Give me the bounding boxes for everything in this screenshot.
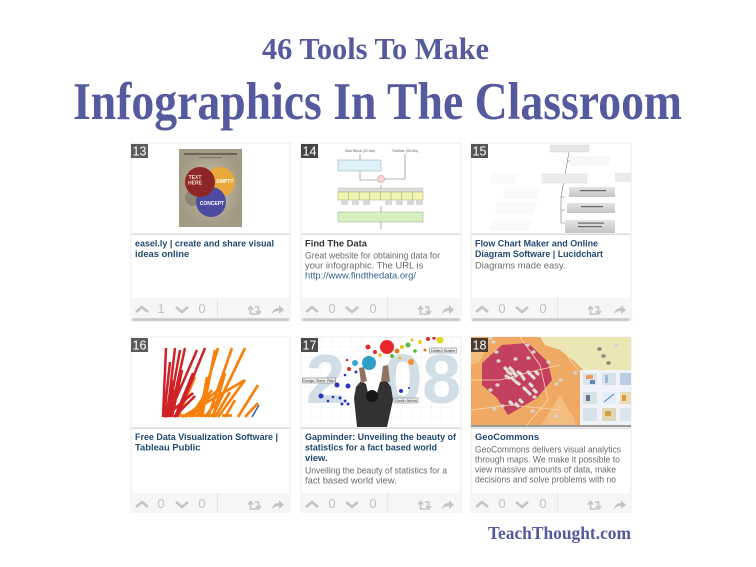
- card 18 description: through maps. We make it possible to: [475, 454, 620, 464]
- card 18 divider: [471, 428, 631, 429]
- card 17 number badge: 17: [303, 338, 316, 352]
- card 18 toolbar: 0: [539, 496, 547, 511]
- card 13 number badge: 13: [133, 144, 146, 158]
- card 18 description: view massive amounts of data, make: [475, 464, 616, 474]
- card 18 image: map: [471, 337, 634, 427]
- card 17 description: fact based world view.: [305, 474, 397, 486]
- card 17 map labels: United States: [431, 348, 455, 353]
- card 16 heading: Tableau Public: [135, 442, 200, 452]
- card 13 image: poster with Venn circles: CONCEPT: [200, 201, 224, 207]
- card 13 image: poster with Venn circles: TEXT: [189, 175, 201, 181]
- card 15 toolbar: [471, 298, 631, 320]
- card 18 number badge: 18: [473, 338, 486, 352]
- card 15 divider: [471, 234, 631, 235]
- card 15 heading: Flow Chart Maker and Online: [475, 238, 598, 248]
- card 18 toolbar: 0: [498, 496, 506, 511]
- card 15 number badge: 15: [473, 144, 486, 158]
- card 15 heading: [475, 238, 603, 259]
- card 13 image: poster with Venn circles: EMPTY: [216, 179, 234, 185]
- card 13 heading: easel.ly | create and share visual: [135, 238, 274, 248]
- card 14 description: your infographic. The URL is: [305, 260, 424, 270]
- card 15 toolbar: 0: [539, 301, 547, 316]
- card 13 heading line 2: ideas online: [135, 248, 189, 259]
- card 17 map labels: Congo, Dem. Rep.: [302, 378, 336, 383]
- card 13 image: poster with Venn circles: HERE: [188, 180, 203, 186]
- card 17 toolbar: 0: [328, 496, 336, 511]
- card 14 description: [305, 250, 440, 280]
- card 17 heading: statistics for a fact based world: [305, 442, 437, 452]
- card 17 map labels: [302, 348, 456, 403]
- card 16 toolbar: [131, 493, 290, 512]
- card 14 image: block diagram: [338, 149, 423, 229]
- card 13: easel.ly: [131, 143, 290, 320]
- card 18 heading: GeoCommons: [475, 431, 539, 442]
- card 16 heading: Free Data Visualization Software |: [135, 431, 278, 442]
- card 17 heading: [305, 431, 457, 463]
- card 16 image: red and orange line chart: [163, 348, 259, 417]
- card 13 toolbar: 1: [157, 301, 165, 316]
- card 14 toolbar: [301, 298, 461, 320]
- card 14 toolbar: 0: [328, 301, 336, 316]
- card 18 toolbar: [471, 493, 631, 512]
- card 16 heading: [135, 431, 278, 452]
- card 14 number badge: 14: [303, 144, 316, 158]
- card 14 description: Great website for obtaining data for: [305, 250, 440, 260]
- card 14 image: block diagram: Start Block (32 bits): [345, 149, 375, 153]
- card 14 description: http://www.findthedata.org/: [305, 270, 416, 280]
- card 17 description: Unveiling the beauty of statistics for a: [305, 464, 448, 476]
- card 15 heading: Diagram Software | Lucidchart: [475, 248, 603, 259]
- card 17 description: [305, 464, 448, 486]
- card 13 toolbar: [131, 298, 290, 320]
- card 16 divider: [131, 428, 290, 429]
- card 15 description: Diagrams made easy.: [475, 260, 566, 270]
- source credit: TeachThought.com: [488, 523, 631, 543]
- card 15 image: org chart: [490, 145, 635, 233]
- card 14 divider: [301, 234, 461, 235]
- card 17: Gapminder: [301, 336, 461, 512]
- card 14: Find The Data: [301, 143, 461, 320]
- card 17 heading: view.: [305, 452, 328, 463]
- card 18 description: decisions and solve problems with no: [475, 474, 616, 484]
- card 17 divider: [301, 428, 461, 429]
- card 17 toolbar: 0: [369, 496, 377, 511]
- card 16 number badge: 16: [133, 338, 146, 352]
- card 13 toolbar: 0: [198, 301, 206, 316]
- card 18 description: GeoCommons delivers visual analytics: [475, 444, 621, 454]
- card 17 image: 2008 bubble chart with man: 2008: [306, 340, 461, 418]
- card 18 description: [475, 444, 621, 484]
- card 17 heading: Gapminder: Unveiling the beauty of: [305, 431, 457, 442]
- card 16 toolbar: 0: [198, 496, 206, 511]
- card 16 toolbar: 0: [157, 496, 165, 511]
- card 13 image: poster with Venn circles: [179, 149, 242, 227]
- card 18 thumbnail panel: [580, 370, 634, 425]
- card 14 toolbar: 0: [369, 301, 377, 316]
- title line 1: 46 Tools To Make: [262, 31, 489, 66]
- card 17 map labels: South Africa: [395, 398, 418, 403]
- card 13 divider: [131, 234, 290, 235]
- card 14 heading: Find The Data: [305, 238, 368, 248]
- card 17 toolbar: [301, 493, 461, 512]
- card 15 toolbar: 0: [498, 301, 506, 316]
- card 16: Tableau Public: [131, 337, 290, 512]
- card 15: Lucidchart: [471, 143, 635, 320]
- card 14 image: block diagram: TeaBlue (48 bits): [392, 149, 418, 153]
- card 18: GeoCommons: [471, 337, 634, 512]
